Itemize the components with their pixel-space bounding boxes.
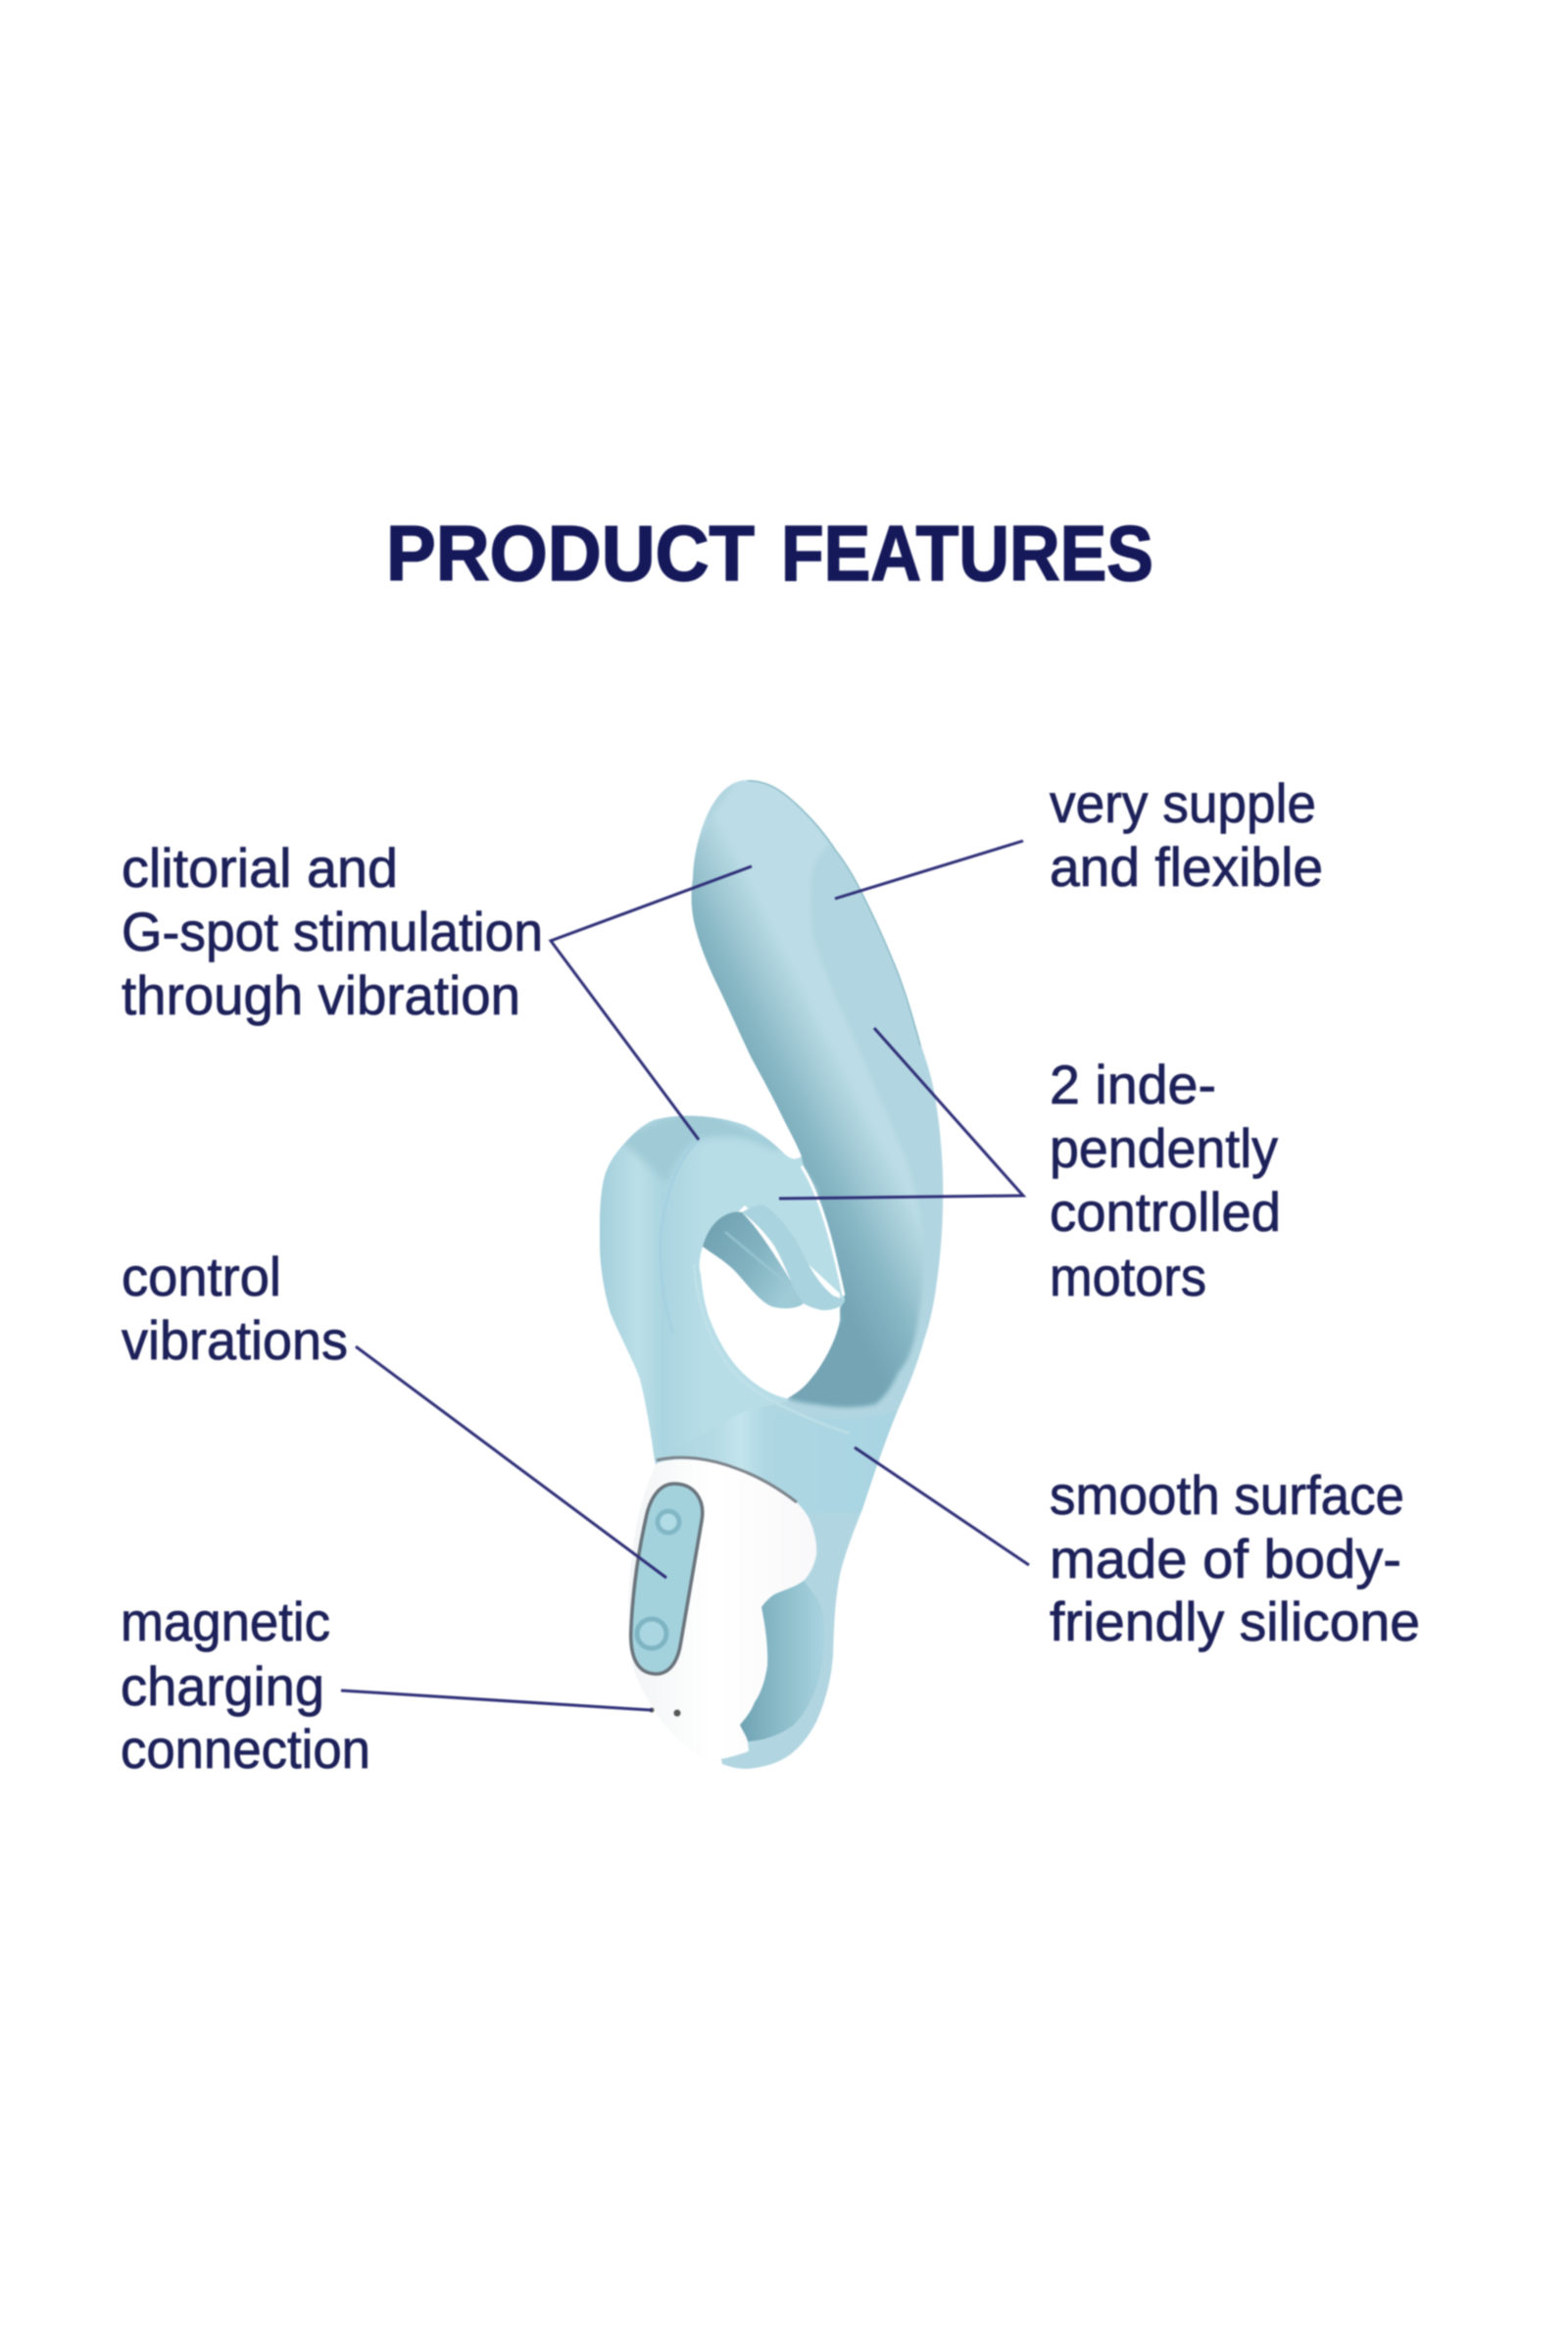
tongue flap bbox=[742, 1204, 845, 1310]
neck bbox=[655, 1411, 896, 1511]
line: control bbox=[356, 1347, 666, 1578]
label: stimulation bbox=[122, 837, 543, 1026]
tongue dark inner bbox=[703, 1212, 804, 1308]
stem front face bbox=[676, 764, 924, 1407]
label: stimulation: through vibration bbox=[122, 964, 520, 1026]
label: magnetic charging bbox=[121, 1591, 370, 1780]
hook bbox=[600, 1156, 845, 1435]
label: smooth surface: friendly silicone bbox=[1050, 1591, 1420, 1652]
label: motors: pendently bbox=[1050, 1117, 1278, 1179]
silver trim bbox=[657, 1457, 797, 1502]
title bbox=[386, 510, 1153, 597]
callout lines bbox=[341, 841, 1029, 1710]
label: control vibrations: control bbox=[122, 1246, 281, 1307]
label: motors: 2 inde- bbox=[1050, 1054, 1216, 1115]
hook fold bbox=[661, 1140, 699, 1333]
minus button bbox=[637, 1619, 666, 1648]
label: supple bbox=[1050, 772, 1323, 898]
label: motors: controlled bbox=[1050, 1181, 1281, 1243]
product illustration bbox=[588, 764, 943, 1769]
label: stimulation: G-spot stimulation bbox=[122, 901, 543, 962]
title: FEATURES bbox=[781, 510, 1153, 597]
hook top cap bbox=[624, 1115, 778, 1176]
tongue ridge bbox=[725, 1232, 791, 1287]
label: motors bbox=[1050, 1054, 1281, 1307]
label: magnetic charging: connection bbox=[121, 1718, 370, 1780]
label: supple: very supple bbox=[1050, 772, 1316, 834]
title: PRODUCT bbox=[386, 510, 755, 597]
button pill bbox=[631, 1484, 703, 1674]
ring ridge bbox=[694, 1264, 850, 1434]
label: supple: and flexible bbox=[1050, 836, 1323, 898]
white handle bbox=[629, 1459, 816, 1761]
flap rim bbox=[748, 780, 921, 1046]
line: magnetic bbox=[341, 1690, 652, 1710]
line: supple bbox=[835, 841, 1023, 899]
label: motors: motors bbox=[1050, 1246, 1206, 1307]
line: stimulation bbox=[551, 866, 752, 1140]
label: magnetic charging: charging bbox=[121, 1655, 324, 1717]
line: smooth surface bbox=[855, 1447, 1029, 1565]
label: smooth surface: made of body- bbox=[1050, 1528, 1401, 1590]
hook sliver bbox=[802, 1166, 844, 1296]
label: smooth surface: smooth surface bbox=[1050, 1464, 1404, 1526]
label: stimulation: clitorial and bbox=[122, 837, 398, 899]
label: control vibrations: vibrations bbox=[122, 1309, 348, 1371]
charging dots bbox=[649, 1707, 680, 1717]
ring inner band bbox=[740, 1581, 824, 1741]
plus button bbox=[658, 1511, 679, 1533]
line: motors bbox=[779, 1028, 1023, 1199]
center hole bbox=[700, 1205, 840, 1398]
label: smooth surface bbox=[1050, 1464, 1420, 1652]
soft shading bbox=[588, 764, 924, 1741]
body silhouette bbox=[600, 780, 943, 1769]
label: magnetic charging: magnetic bbox=[121, 1591, 330, 1652]
label: control vibrations bbox=[122, 1246, 348, 1371]
control panel bbox=[631, 1484, 703, 1674]
